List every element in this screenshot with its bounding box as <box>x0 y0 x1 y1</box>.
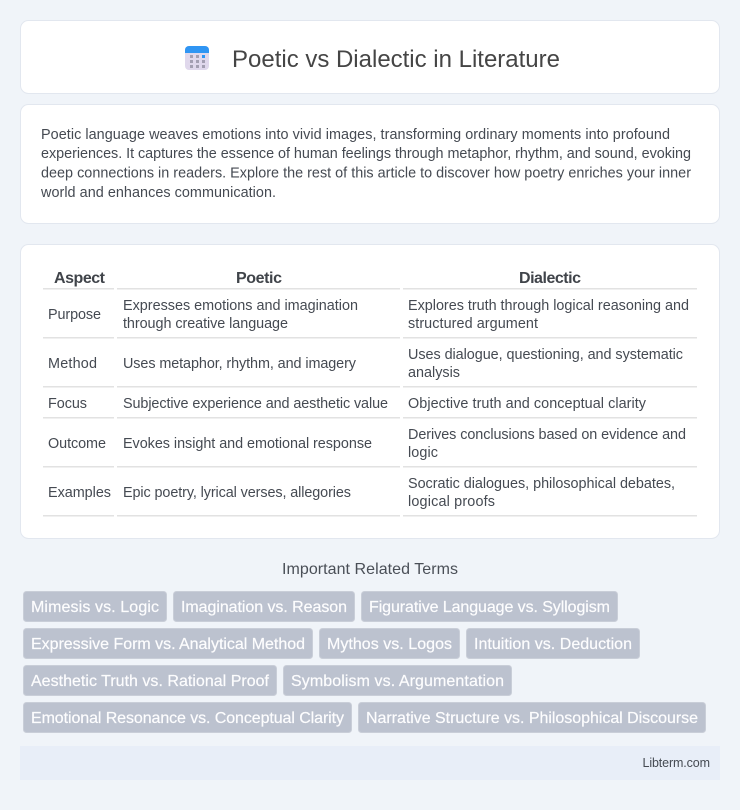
row: purpose: structured argument <box>408 316 538 332</box>
row: outcome: Evokes insight and emotional response <box>123 436 372 452</box>
table header: Aspect <box>54 270 106 287</box>
row: examples: logical proofs <box>408 494 495 510</box>
row: examples: Epic poetry, lyrical verses, allegories <box>123 485 351 501</box>
row: purpose: Expresses emotions and imagination <box>123 298 358 314</box>
tag <box>284 666 512 696</box>
intro text: deep connections in readers. Explore the rest of this article to discover how poetry enriches your inner <box>41 166 691 182</box>
intro text: world and enhances communication. <box>40 185 276 201</box>
table header: Poetic <box>236 270 282 287</box>
icon: calendar <box>185 46 209 70</box>
row: method: analysis <box>408 365 460 381</box>
row: purpose: Purpose <box>48 307 101 323</box>
row: examples: Socratic dialogues, philosophical debates, <box>408 476 675 492</box>
panel: comparison table <box>20 244 720 538</box>
tag: Aesthetic Truth vs. Rational Proof <box>31 673 270 690</box>
title: Poetic vs Dialectic in Literature <box>232 46 560 73</box>
tag: Expressive Form vs. Analytical Method <box>31 636 305 653</box>
row: purpose <box>48 298 689 332</box>
row: focus: Objective truth and conceptual clarity <box>408 396 647 412</box>
table rules <box>43 288 697 516</box>
row: outcome: Derives conclusions based on evidence and <box>408 427 686 443</box>
tag <box>24 666 276 696</box>
row: outcome <box>48 427 686 461</box>
tag: Narrative Structure vs. Philosophical Discourse <box>366 710 698 727</box>
row: method: Uses metaphor, rhythm, and imagery <box>123 356 357 372</box>
intro text <box>40 127 691 201</box>
row: purpose: through creative language <box>123 316 288 332</box>
row: examples <box>48 476 675 510</box>
tag <box>320 628 460 658</box>
tag: Intuition vs. Deduction <box>474 636 632 653</box>
row: purpose: Explores truth through logical reasoning and <box>408 298 689 314</box>
panel: header <box>20 20 720 94</box>
row: examples: Examples <box>48 485 111 501</box>
tag: Mythos vs. Logos <box>327 636 452 653</box>
tag <box>24 628 312 658</box>
tag <box>358 702 706 732</box>
panel: introduction <box>20 104 720 224</box>
tag <box>24 702 352 732</box>
tag: Emotional Resonance vs. Conceptual Clarity <box>31 710 344 727</box>
footer <box>20 746 720 780</box>
related terms tags <box>24 592 706 732</box>
tag <box>466 628 640 658</box>
row: method <box>48 347 683 381</box>
tag <box>24 592 166 622</box>
table header <box>54 270 581 287</box>
row: outcome: Outcome <box>48 436 106 452</box>
heading: related terms: Important Related Terms <box>282 561 458 578</box>
intro text: Poetic language weaves emotions into vivid images, transforming ordinary moments into profound <box>41 127 670 143</box>
tag: Symbolism vs. Argumentation <box>291 673 504 690</box>
row: method: Uses dialogue, questioning, and systematic <box>408 347 683 363</box>
tag: Mimesis vs. Logic <box>31 599 159 616</box>
intro text: experiences. It captures the essence of human feelings through metaphor, rhythm, and sound, evoking <box>41 146 691 162</box>
row: method: Method <box>48 356 97 372</box>
row: outcome: logic <box>408 445 438 461</box>
footer: Libterm.com <box>642 756 710 770</box>
tag <box>174 592 354 622</box>
row: focus: Focus <box>48 396 87 412</box>
tag <box>362 592 618 622</box>
row: focus: Subjective experience and aesthetic value <box>123 396 388 412</box>
table header: Dialectic <box>519 270 581 287</box>
row: focus <box>48 396 647 412</box>
tag: Figurative Language vs. Syllogism <box>369 599 610 616</box>
tag: Imagination vs. Reason <box>181 599 347 616</box>
